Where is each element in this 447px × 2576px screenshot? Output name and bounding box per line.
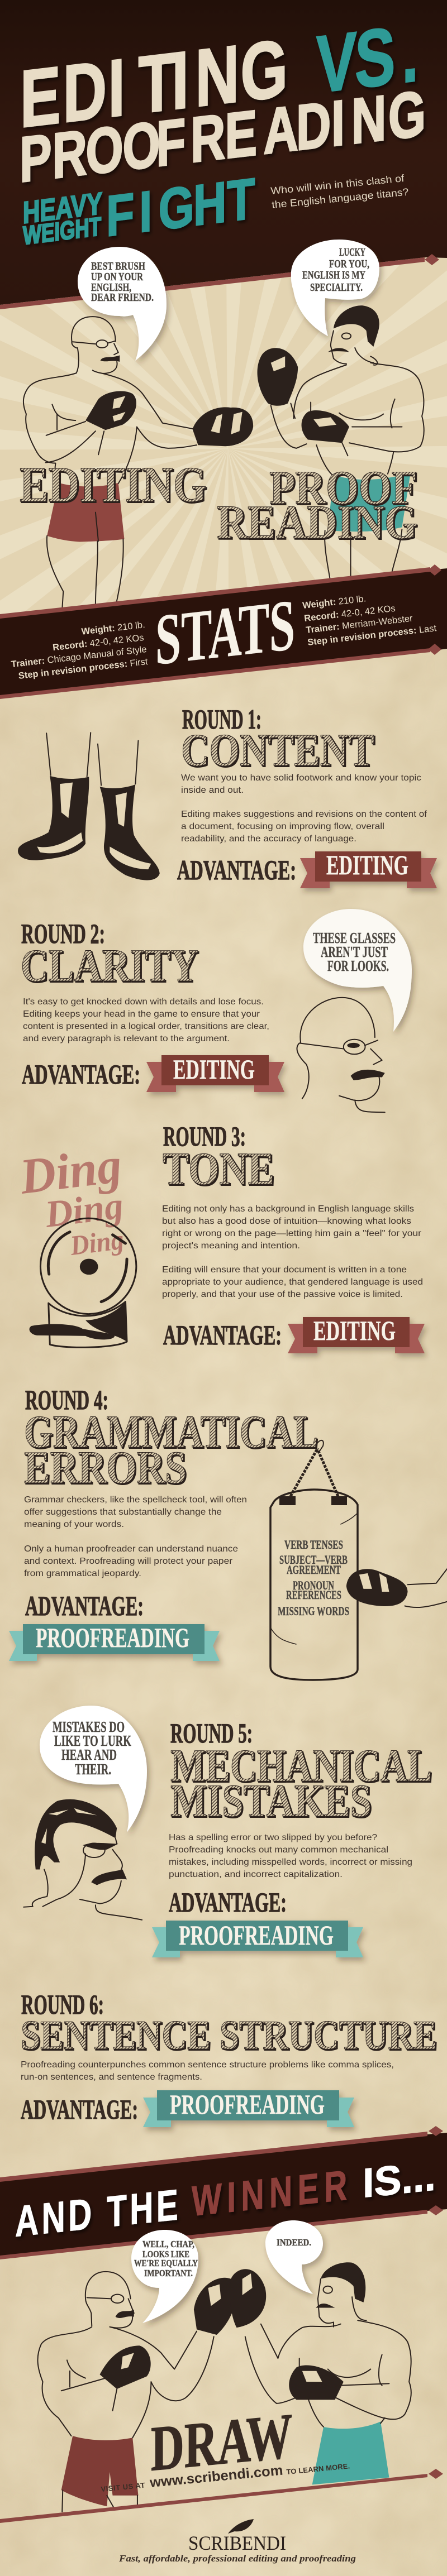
stats: editing: [11, 620, 149, 681]
label: proofreading: [217, 461, 419, 550]
heading: tone: TONE: [164, 1144, 275, 1195]
speech bubble: best brush: BEST BRUSH: [91, 260, 145, 272]
title: [20, 8, 426, 250]
speech bubble: lucky for you: SPECIALITY.: [310, 281, 363, 294]
text: content: inside and out.: [181, 786, 244, 795]
subtitle: [270, 173, 409, 210]
website link: www.scribendi.com: [149, 2463, 284, 2491]
text: tone: but also has a good dose of intuition—knowing what looks: [162, 1217, 411, 1226]
speech bubble: indeed: INDEED.: [277, 2237, 311, 2248]
text: grammatical errors: offer suggestions that substantially change the: [24, 1507, 222, 1517]
banner: proofreading: [143, 2089, 354, 2127]
text: mechanical mistakes: Proofreading knocks out many common mechanical: [169, 1845, 388, 1855]
text: grammatical errors: from grammatical jeopardy.: [24, 1569, 141, 1578]
banner: proofreading: [152, 1919, 363, 1957]
banner: editing: EDITING: [326, 849, 408, 880]
stats: proofreading: Step in revision process: Last: [307, 623, 437, 648]
label: editing: EDITING: [21, 458, 208, 514]
text: mechanical mistakes: punctuation, and incorrect capitalization.: [169, 1870, 343, 1879]
title: WEIGHT: [23, 212, 101, 250]
text: tone: properly, and that your use of the passive voice is limited.: [162, 1290, 403, 1299]
speech bubble: best brush: UP ON YOUR: [91, 271, 143, 283]
boxer: proofreading: [245, 2262, 411, 2484]
speech bubble: mistakes: HEAR AND: [61, 1746, 117, 1763]
round 2: [21, 918, 284, 1092]
speech bubble: lucky for you: LUCKY: [339, 246, 365, 258]
text: content: a document, focusing on improving flow, overall: [181, 822, 384, 831]
stats: proofreading: Weight: 210 lb.: [302, 593, 367, 611]
label: proofreading: PROOF: [269, 461, 417, 514]
icon: boots: [18, 732, 160, 880]
text: content: [181, 773, 427, 844]
text: grammatical errors: [24, 1495, 247, 1578]
heading: and the winner is: AND THE: [15, 2180, 178, 2246]
bag labels: PRONOUN: [293, 1578, 334, 1592]
title: VS.: [316, 8, 419, 111]
banner: editing: EDITING: [173, 1054, 255, 1085]
speech bubble: mistakes: LIKE TO LURK: [54, 1732, 131, 1749]
stats: editing: Record: 42-0, 42 KOs: [52, 633, 144, 653]
winner band: [0, 2126, 447, 2259]
text: sentence structure: [21, 2060, 394, 2082]
round 2: ADVANTAGE:: [22, 1059, 140, 1090]
bottom rule: [0, 2469, 443, 2523]
speech bubble: well chap: LOOKS LIKE: [142, 2249, 189, 2259]
stats: editing: Trainer: Chicago Manual of Style: [11, 644, 147, 669]
round 6: [21, 1989, 438, 2127]
speech bubble: mistakes: MISTAKES DO: [53, 1718, 125, 1735]
speech bubble: these glasses: FOR LOOKS.: [327, 957, 389, 974]
text: content: Editing makes suggestions and revisions on the content of: [181, 810, 427, 819]
round 6: ADVANTAGE:: [21, 2094, 138, 2125]
speech bubble: best brush: [78, 247, 167, 361]
text: tone: project's meaning and intention.: [162, 1241, 300, 1251]
speech bubble: these glasses: [303, 909, 412, 1032]
round 4: [9, 1384, 319, 1661]
stats heading: STATS: [155, 585, 295, 681]
bag labels: VERB TENSES: [284, 1538, 343, 1552]
banner: proofreading: PROOFREADING: [36, 1622, 189, 1653]
banner: proofreading: PROOFREADING: [170, 2089, 325, 2120]
text: tone: [162, 1204, 423, 1299]
text: tone: right or wrong on the page—letting him gain a "feel" for your: [162, 1229, 422, 1238]
website link: VISIT US AT: [101, 2481, 145, 2493]
round 4: ROUND 4:: [25, 1384, 108, 1415]
heading: grammatical errors: [24, 1406, 319, 1494]
icon: ding text: [16, 1137, 126, 1261]
text: content: readability, and the accuracy of language.: [181, 834, 356, 844]
stats: proofreading: [302, 593, 437, 648]
text: sentence structure: Proofreading counterpunches common sentence structure problems like comma splices,: [21, 2060, 394, 2070]
speech bubble: these glasses: AREN'T JUST: [321, 944, 388, 960]
round 2: ROUND 2:: [21, 918, 105, 949]
heading: tone: TONE: [163, 1143, 274, 1194]
round 6: ROUND 6:: [21, 1989, 104, 2020]
banner: editing: [146, 1054, 284, 1092]
round 1: [177, 703, 437, 888]
text: clarity: It's easy to get knocked down with details and lose focus.: [23, 997, 264, 1007]
text: clarity: Editing keeps your head in the game to ensure that your: [23, 1009, 260, 1019]
stats: editing: Step in revision process: First: [18, 657, 149, 681]
round 5: ROUND 5:: [170, 1717, 253, 1749]
round 5: [152, 1717, 433, 1957]
text: tone: Editing will ensure that your document is written in a tone: [162, 1265, 407, 1275]
icon: bell: [30, 1218, 136, 1347]
title: PROOFREADING: [20, 77, 426, 196]
icon: feather: [228, 2519, 254, 2534]
speech bubble: well chap: WE'RE EQUALLY: [134, 2258, 198, 2268]
boxer: editing: [23, 317, 253, 610]
round 5: ADVANTAGE:: [169, 1886, 287, 1918]
heading: grammatical errors: ERRORS: [24, 1442, 187, 1493]
speech bubble: indeed: [265, 2220, 323, 2294]
bag labels: AGREEMENT: [287, 1563, 341, 1577]
speech bubble: these glasses: THESE GLASSES: [313, 930, 396, 946]
speech bubble: lucky for you: FOR YOU,: [329, 258, 369, 270]
text: sentence structure: run-on sentences, and sentence fragments.: [21, 2072, 202, 2082]
boxer: editing: [37, 2269, 266, 2512]
subtitle: the English language titans?: [271, 186, 409, 210]
round 3: ADVANTAGE:: [163, 1319, 282, 1351]
heading: mechanical mistakes: [170, 1740, 433, 1827]
speech bubble: lucky for you: ENGLISH IS MY: [302, 269, 365, 281]
round 4: ADVANTAGE:: [25, 1590, 144, 1621]
heading: and the winner is: [15, 2152, 436, 2246]
text: grammatical errors: Only a human proofreader can understand nuance: [24, 1544, 238, 1554]
text: grammatical errors: and context. Proofreading will protect your paper: [24, 1557, 233, 1566]
label: proofreading: READING: [217, 495, 417, 549]
logo: scribendi: Fast, affordable, professional editing and proofreading: [118, 2553, 356, 2564]
text: grammatical errors: meaning of your words.: [24, 1520, 124, 1529]
icon: ding text: Ding: [16, 1137, 125, 1205]
title: EDITING: [20, 23, 288, 145]
bag labels: MISSING WORDS: [278, 1604, 349, 1618]
subtitle: Who will win in this clash of: [270, 173, 405, 197]
title: HEAVY: [23, 186, 102, 230]
text: clarity: and every paragraph is relevant to the argument.: [23, 1034, 230, 1043]
header panel: [0, 0, 447, 309]
icon: ding text: Ding: [68, 1224, 126, 1261]
icon: bald head with glasses: [297, 998, 385, 1112]
speech bubble: well chap: IMPORTANT.: [144, 2268, 193, 2278]
speech bubble: best brush: ENGLISH,: [91, 281, 131, 294]
speech bubble: well chap: [131, 2230, 198, 2323]
final boxers: [37, 2262, 411, 2512]
heading: and the winner is: IS...: [363, 2152, 436, 2206]
heading: clarity: CLARITY: [22, 941, 199, 992]
boxer: proofreading: [257, 305, 424, 580]
speech bubble: mistakes: THEIR.: [75, 1761, 111, 1778]
logo: scribendi: SCRIBENDI: [188, 2532, 286, 2554]
sunburst behind boxers: [0, 265, 447, 614]
text: mechanical mistakes: [169, 1833, 412, 1879]
text: tone: appropriate to your audience, that gendered language is used: [162, 1277, 423, 1287]
icon: ding text: Ding: [42, 1184, 126, 1236]
banner: proofreading: PROOFREADING: [179, 1919, 334, 1951]
icon: glove punching bag: [346, 1569, 447, 1607]
heading: grammatical errors: GRAMMATICAL: [25, 1407, 319, 1458]
label: proofreading: PROOF: [270, 462, 419, 515]
heading: content: CONTENT: [181, 724, 374, 775]
bag labels: REFERENCES: [286, 1588, 341, 1602]
bag labels: SUBJECT—VERB: [279, 1553, 348, 1567]
icon: punching bag: [270, 1440, 358, 1680]
text: clarity: [23, 997, 269, 1043]
label: proofreading: READING: [218, 496, 419, 550]
text: tone: Editing not only has a background in English language skills: [162, 1204, 414, 1214]
text: content: We want you to have solid footwork and know your topic: [181, 773, 421, 783]
text: clarity: content is presented in a logical order, transitions are clear,: [23, 1022, 269, 1031]
banner: editing: EDITING: [313, 1315, 396, 1346]
heading: grammatical errors: GRAMMATICAL: [24, 1406, 318, 1457]
logo: scribendi: [118, 2519, 356, 2564]
label: editing: EDITING: [20, 457, 207, 513]
heading: clarity: CLARITY: [21, 940, 198, 991]
bag labels: [278, 1538, 349, 1618]
heading: mechanical mistakes: MISTAKES: [172, 1776, 373, 1827]
banner: proofreading: [9, 1622, 220, 1661]
text: grammatical errors: Grammar checkers, like the spellcheck tool, will often: [24, 1495, 247, 1505]
heading: mechanical mistakes: MISTAKES: [170, 1775, 372, 1826]
round 3: ROUND 3:: [163, 1121, 246, 1152]
speech bubble: well chap: WELL, CHAP,: [142, 2239, 194, 2249]
speech bubble: mistakes: [40, 1706, 147, 1832]
round 3: [162, 1121, 425, 1353]
stats: editing: Weight: 210 lb.: [81, 620, 145, 637]
stats: proofreading: Trainer: Merriam-Webster: [305, 614, 413, 635]
speech bubble: lucky for you: [291, 240, 379, 336]
website link: [101, 2462, 350, 2493]
text: mechanical mistakes: Has a spelling error or two slipped by you before?: [169, 1833, 377, 1842]
banner: editing: [300, 849, 437, 888]
speech bubble: best brush: DEAR FRIEND.: [91, 291, 154, 304]
heading: draw: DRAW: [151, 2400, 292, 2484]
website link: TO LEARN MORE.: [286, 2462, 350, 2476]
stats band: [0, 564, 447, 699]
text: mechanical mistakes: mistakes, including misspelled words, incorrect or missing: [169, 1857, 412, 1867]
round 1: ADVANTAGE:: [177, 854, 296, 885]
stats: proofreading: Record: 42-0, 42 KOs: [303, 604, 396, 624]
title: FIGHT: [106, 166, 255, 248]
round 1: ROUND 1:: [182, 703, 261, 735]
banner: editing: [288, 1315, 425, 1353]
heading: content: CONTENT: [182, 725, 375, 777]
heading: and the winner is: WINNER: [192, 2162, 347, 2225]
icon: head with monocle: [23, 1799, 142, 1920]
heading: grammatical errors: ERRORS: [25, 1443, 188, 1494]
